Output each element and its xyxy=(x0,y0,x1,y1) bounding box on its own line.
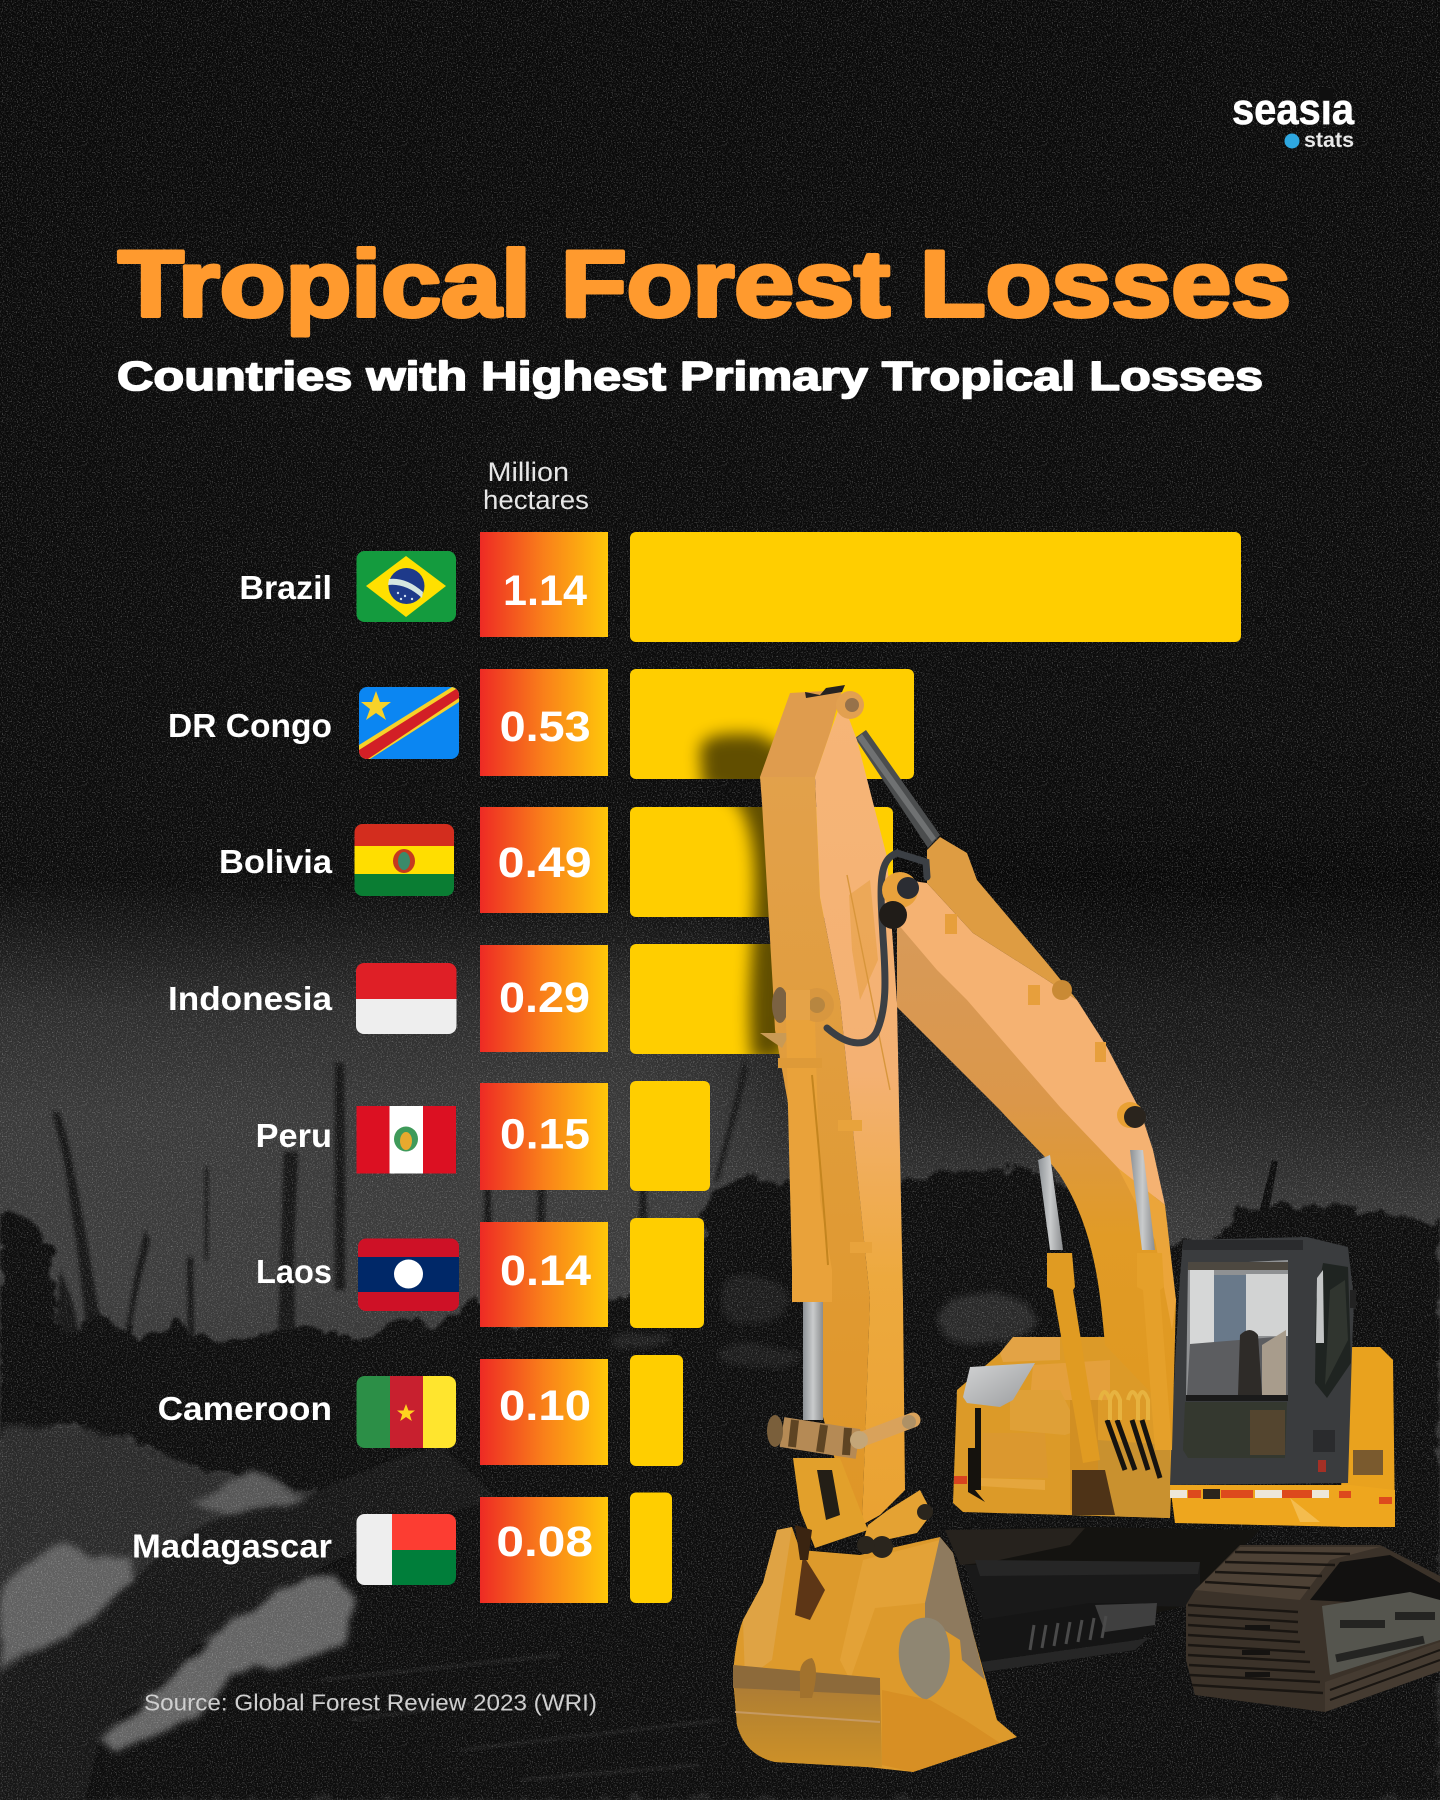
value: 0.14: 0.14 xyxy=(500,1247,591,1295)
bar: Peru xyxy=(630,1081,710,1191)
source note: Source: Global Forest Review 2023 (WRI) xyxy=(144,1690,597,1716)
boom: lower curved arch xyxy=(897,915,1176,1450)
value badge: 0.08 xyxy=(480,1497,608,1603)
value: 1.14: 1.14 xyxy=(503,567,587,615)
bar: Cameroon xyxy=(630,1355,683,1466)
boom: light upper face xyxy=(897,880,1165,1205)
arm: top pin xyxy=(836,691,864,719)
machine body: lower deck and stripe xyxy=(1170,1450,1395,1527)
value: 0.53: 0.53 xyxy=(500,703,591,751)
flag: DR Congo xyxy=(359,687,459,759)
right crawler track xyxy=(1186,1545,1440,1712)
value badge: 1.14 xyxy=(480,532,608,637)
title: Tropical Forest Losses xyxy=(118,231,1291,336)
row: Bolivia xyxy=(219,807,893,917)
value: 0.49: 0.49 xyxy=(498,839,592,887)
flag: Cameroon xyxy=(356,1376,456,1448)
label: Cameroon: Cameroon xyxy=(158,1390,332,1427)
bar: Laos xyxy=(630,1218,704,1328)
row: DR Congo xyxy=(168,669,914,779)
value badge: 0.53 xyxy=(480,669,608,776)
label: Indonesia: Indonesia xyxy=(168,980,333,1017)
boom: foot pin xyxy=(1117,1102,1146,1128)
arm: light face xyxy=(815,700,905,1525)
column heading: million hectares: hectares xyxy=(483,485,589,515)
label: Madagascar: Madagascar xyxy=(132,1528,332,1564)
arm: outer dark side xyxy=(760,777,870,1525)
row: Laos xyxy=(256,1218,704,1328)
arm: top pin dark tip xyxy=(805,685,845,698)
subtitle: Countries with Highest Primary Tropical Losses xyxy=(117,353,1263,399)
stick hydraulic rod xyxy=(855,730,940,848)
row: Peru xyxy=(256,1081,710,1191)
value: 0.10: 0.10 xyxy=(499,1382,591,1430)
value: 0.08: 0.08 xyxy=(496,1518,593,1566)
row: Indonesia xyxy=(168,944,800,1054)
boom: upper stick cylinder mount xyxy=(927,837,1077,1000)
value badge: 0.10 xyxy=(480,1359,608,1465)
value badge: 0.15 xyxy=(480,1083,608,1190)
boom hydraulic cylinders xyxy=(1038,1150,1172,1463)
flag: Indonesia xyxy=(356,963,457,1034)
label: Bolivia: Bolivia xyxy=(219,843,333,880)
flag: Madagascar xyxy=(356,1514,456,1585)
row: Cameroon xyxy=(158,1355,683,1466)
machine body: left housing xyxy=(953,1337,1175,1518)
bar: Madagascar xyxy=(630,1492,672,1603)
hydraulic hose xyxy=(827,853,927,1043)
bar: Bolivia xyxy=(630,807,893,917)
machine body: rear counterweight xyxy=(1340,1347,1395,1527)
value: 0.29: 0.29 xyxy=(499,974,590,1022)
label: Brazil: Brazil xyxy=(239,569,332,606)
bar: DR Congo xyxy=(630,669,914,779)
machine body: operator cab xyxy=(1170,1237,1356,1485)
row: Brazil xyxy=(239,532,1241,642)
column heading: million hectares: Million xyxy=(488,457,569,487)
undercarriage xyxy=(945,1527,1260,1672)
arm cylinder xyxy=(760,987,834,1420)
bucket xyxy=(733,1525,1017,1772)
label: Laos: Laos xyxy=(256,1253,332,1290)
flag: Bolivia xyxy=(354,824,454,896)
flag: Brazil xyxy=(356,551,456,622)
excavator xyxy=(733,685,1440,1772)
label: DR Congo: DR Congo xyxy=(168,707,332,744)
value badge: 0.49 xyxy=(480,807,608,913)
label: Peru: Peru xyxy=(256,1117,332,1154)
bar: Brazil xyxy=(630,532,1241,642)
column heading: million hectares xyxy=(483,457,589,515)
flag: Laos xyxy=(358,1238,459,1312)
value: 0.15: 0.15 xyxy=(500,1110,590,1158)
bar: Indonesia xyxy=(630,944,800,1054)
bucket linkage xyxy=(767,1415,933,1548)
logo: seasia stats: stats xyxy=(1304,129,1354,152)
arm: top cap xyxy=(760,690,842,777)
logo: seasia stats: seasia xyxy=(1232,85,1354,134)
value badge: 0.29 xyxy=(480,945,608,1052)
row: Madagascar xyxy=(132,1492,672,1603)
value badge: 0.14 xyxy=(480,1222,608,1327)
boom top pivot bolt xyxy=(879,872,919,929)
logo: seasia stats xyxy=(1232,85,1354,152)
flag: Peru xyxy=(356,1106,456,1174)
excavator shadow on bars xyxy=(700,734,800,1060)
